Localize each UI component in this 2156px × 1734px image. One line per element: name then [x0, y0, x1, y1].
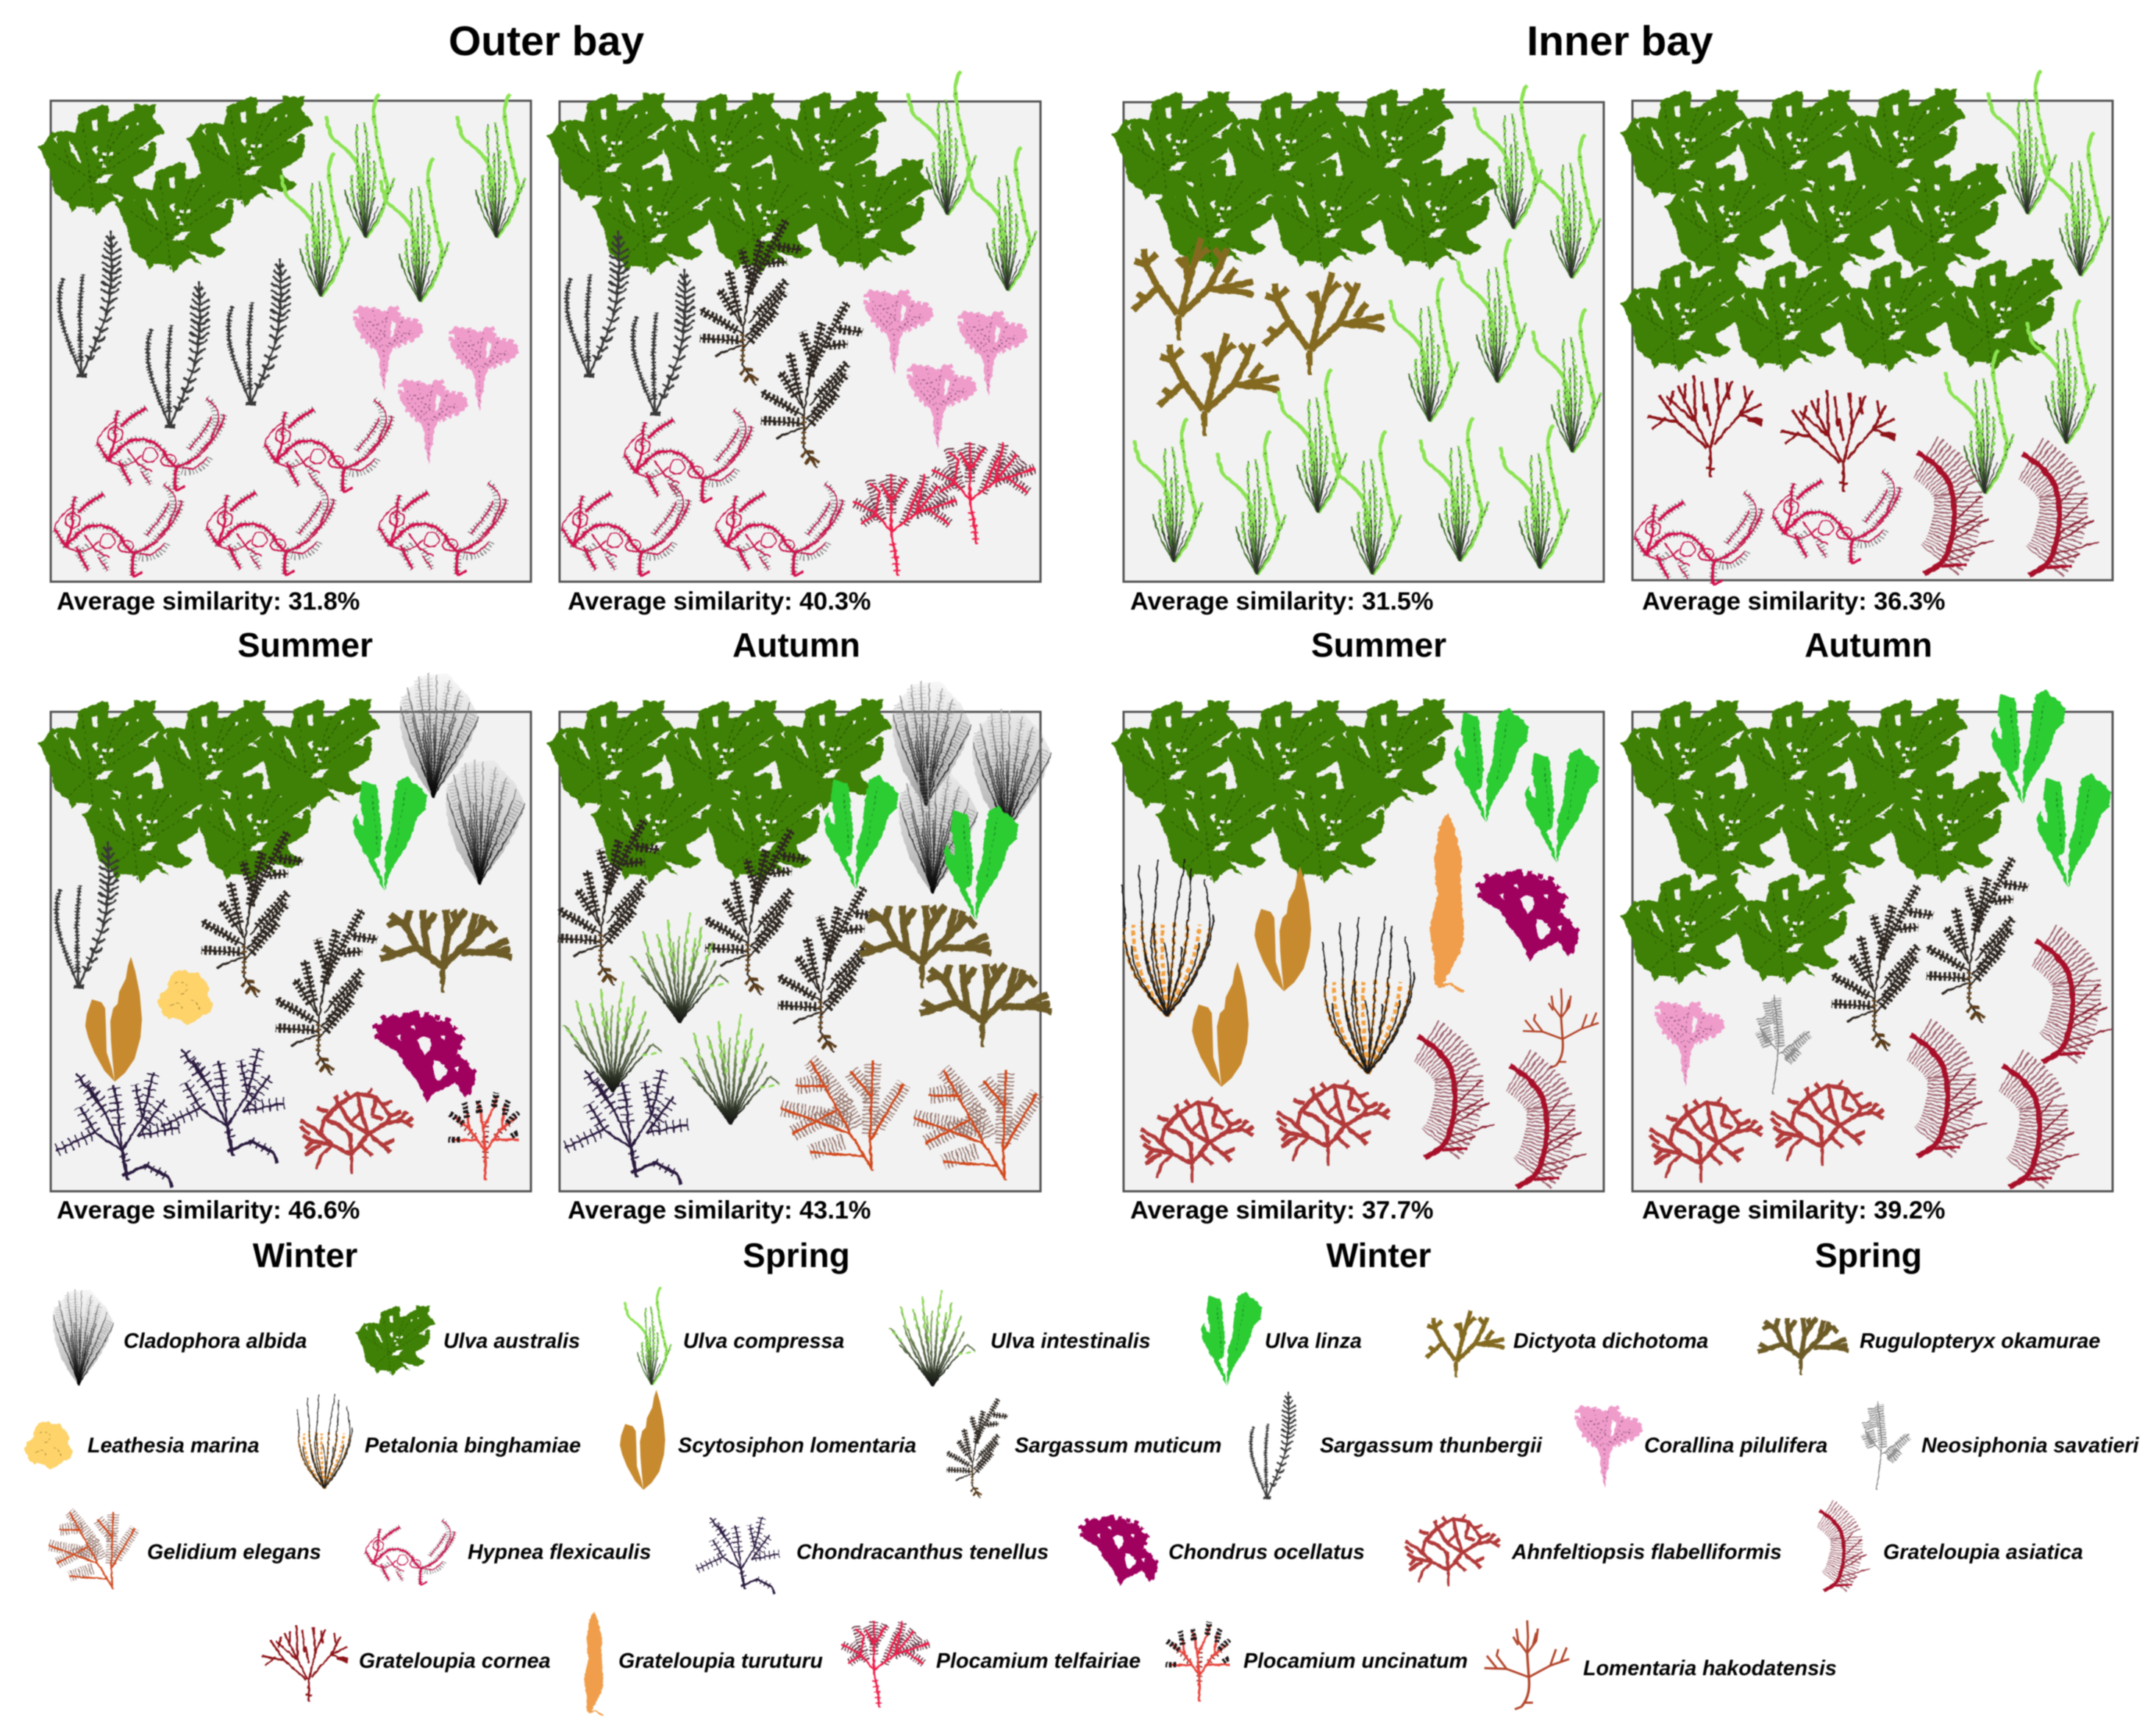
legend item: Chondrus ocellatus: Chondrus ocellatus — [1168, 1541, 1365, 1564]
Hypnea flexicaulis plants — [1635, 471, 1900, 585]
Ulva linza plants — [1454, 707, 1599, 863]
Sargassum thunbergii plants — [60, 231, 290, 427]
Grateloupia asiatica plants — [1418, 1036, 1586, 1187]
legend item: Ulva compressa: Ulva compressa — [683, 1330, 844, 1353]
legend item: Ahnfeltiopsis flabelliformis: Ahnfeltiopsis flabelliformis — [1511, 1541, 1782, 1564]
Plocamium uncinatum plant — [449, 1093, 518, 1180]
legend item: Chondracanthus tenellus — [696, 1517, 1049, 1594]
Ulva australis cluster — [1111, 88, 1499, 270]
legend item: Grateloupia turuturu — [584, 1612, 823, 1716]
legend item: Lomentaria hakodatensis — [1485, 1620, 1837, 1709]
legend item: Ulva linza: Ulva linza — [1265, 1330, 1362, 1353]
Rugulopteryx okamurae plant — [380, 910, 512, 993]
Ulva intestinalis plants — [563, 913, 779, 1124]
season heading: Outer bay autumn: Autumn — [732, 626, 860, 664]
Ulva linza plants — [1991, 689, 2111, 888]
Chondracanthus tenellus plant — [565, 1069, 688, 1185]
legend item: Grateloupia cornea — [262, 1625, 551, 1702]
Ulva compressa plants — [1946, 71, 2109, 493]
legend item: Ulva australis — [355, 1305, 580, 1376]
legend item: Hypnea flexicaulis — [365, 1520, 652, 1585]
legend item: Dictyota dichotoma — [1427, 1310, 1708, 1377]
season heading: Inner bay autumn: Autumn — [1805, 626, 1932, 664]
Plocamium telfairiae plants — [853, 443, 1035, 576]
Grateloupia asiatica plants — [1917, 452, 2099, 575]
legend item: Grateloupia asiatica — [1819, 1510, 2083, 1591]
panel: Inner bay spring — [1620, 689, 2113, 1191]
Ahnfeltiopsis flabelliformis plant — [300, 1088, 413, 1174]
season heading: Outer bay summer: Summer — [238, 626, 373, 664]
Grateloupia asiatica plants — [1910, 941, 2112, 1187]
legend item: Rugulopteryx okamurae: Rugulopteryx okamurae — [1860, 1330, 2100, 1353]
Ulva compressa plants — [1135, 85, 1601, 574]
legend item: Gelidium elegans: Gelidium elegans — [147, 1541, 321, 1564]
legend item: Grateloupia turuturu: Grateloupia turuturu — [618, 1649, 823, 1673]
legend item: Chondracanthus tenellus: Chondracanthus tenellus — [796, 1541, 1049, 1564]
legend item: Leathesia marina: Leathesia marina — [88, 1434, 260, 1458]
Ulva linza plants — [824, 774, 1018, 921]
legend item: Corallina pilulifera — [1577, 1406, 1828, 1488]
legend item: Plocamium telfairiae — [841, 1621, 1141, 1708]
Grateloupia turuturu plant — [1429, 813, 1464, 992]
legend item: Grateloupia asiatica: Grateloupia asiatica — [1883, 1541, 2083, 1564]
season heading: Outer bay spring: Spring — [743, 1236, 850, 1274]
legend item: Ulva compressa — [625, 1287, 844, 1385]
season heading: Inner bay summer: Summer — [1311, 626, 1446, 664]
Ulva australis cluster — [38, 95, 314, 273]
Rugulopteryx okamurae plants — [860, 905, 1052, 1047]
legend item: Ulva australis: Ulva australis — [443, 1330, 580, 1353]
panel: Outer bay summer — [38, 94, 531, 582]
legend item: Sargassum muticum — [946, 1399, 1221, 1498]
panel: Outer bay winter — [38, 673, 531, 1191]
Cladophora albida plants — [892, 681, 1052, 893]
Gelidium elegans plants — [781, 1060, 1037, 1180]
Hypnea flexicaulis plants — [562, 410, 843, 576]
legend item: Chondrus ocellatus — [1080, 1516, 1365, 1586]
legend item: Sargassum muticum: Sargassum muticum — [1015, 1434, 1221, 1458]
legend item: Plocamium telfairiae: Plocamium telfairiae — [936, 1649, 1141, 1673]
Ahnfeltiopsis flabelliformis plants — [1141, 1080, 1390, 1182]
legend item: Corallina pilulifera: Corallina pilulifera — [1644, 1434, 1828, 1458]
Ulva australis cluster — [546, 698, 893, 883]
season heading: Inner bay winter: Winter — [1327, 1236, 1431, 1274]
legend item: Gelidium elegans — [49, 1512, 321, 1589]
Leathesia marina plant — [157, 970, 213, 1024]
similarity label: Inner bay autumn: Average similarity: 36.3% — [1642, 588, 1945, 616]
similarity label: Inner bay winter: Average similarity: 37.7% — [1130, 1196, 1433, 1224]
Ulva compressa plants — [908, 71, 1036, 290]
Hypnea flexicaulis plants — [54, 398, 506, 577]
similarity label: Outer bay winter: Average similarity: 46.6% — [57, 1196, 360, 1224]
Sargassum muticum plants — [201, 832, 377, 1075]
legend item: Hypnea flexicaulis: Hypnea flexicaulis — [468, 1541, 652, 1564]
season heading: Outer bay winter: Winter — [253, 1236, 357, 1274]
legend item: Plocamium uncinatum: Plocamium uncinatum — [1243, 1649, 1468, 1673]
Ulva australis cluster — [1111, 698, 1454, 883]
Sargassum thunbergii plants — [567, 231, 695, 414]
legend: species key — [24, 1287, 2140, 1716]
legend item: Scytosiphon lomentaria — [620, 1390, 916, 1490]
panel: Inner bay autumn — [1620, 71, 2113, 585]
legend item: Sargassum thunbergii — [1251, 1392, 1543, 1498]
legend item: Ulva linza — [1201, 1291, 1362, 1386]
legend item: Leathesia marina — [24, 1421, 260, 1469]
Dictyota dichotoma plants — [1133, 238, 1384, 436]
Cladophora albida plants — [399, 673, 525, 885]
similarity label: Outer bay summer: Average similarity: 31.8% — [57, 588, 360, 616]
Sargassum muticum plants — [700, 220, 863, 468]
Corallina pilulifera plants — [865, 290, 1027, 449]
legend item: Sargassum thunbergii: Sargassum thunbergii — [1320, 1434, 1543, 1458]
legend item: Neosiphonia savatieri: Neosiphonia savatieri — [1921, 1434, 2140, 1458]
Corallina pilulifera plants — [355, 307, 518, 465]
season heading: Inner bay spring: Spring — [1815, 1236, 1922, 1274]
panel: Outer bay spring — [546, 681, 1052, 1191]
Ulva australis cluster — [546, 90, 933, 275]
title: Inner bay: Inner bay — [1527, 18, 1713, 65]
legend item: Petalonia binghamiae: Petalonia binghamiae — [365, 1434, 581, 1458]
Sargassum muticum plants — [558, 820, 879, 1052]
Neosiphonia savatieri plant — [1760, 995, 1810, 1094]
Petalonia binghamiae plants — [1122, 859, 1415, 1074]
similarity label: Inner bay summer: Average similarity: 31.5% — [1130, 588, 1433, 616]
legend item: Ulva intestinalis: Ulva intestinalis — [990, 1330, 1151, 1353]
legend item: Ulva intestinalis — [890, 1290, 1151, 1386]
Ulva australis cluster — [38, 698, 381, 883]
Chondrus ocellatus plant — [375, 1013, 476, 1103]
legend item: Cladophora albida: Cladophora albida — [124, 1330, 307, 1353]
Chondrus ocellatus plant — [1478, 871, 1579, 962]
similarity label: Outer bay autumn: Average similarity: 40.3% — [568, 588, 871, 616]
Chondracanthus tenellus plants — [56, 1048, 285, 1188]
legend item: Cladophora albida — [53, 1289, 307, 1385]
legend item: Scytosiphon lomentaria: Scytosiphon lomentaria — [678, 1434, 916, 1458]
legend item: Plocamium uncinatum — [1166, 1622, 1468, 1702]
Ulva australis cluster — [1620, 698, 2010, 985]
similarity label: Outer bay spring: Average similarity: 43.1% — [568, 1196, 871, 1224]
legend item: Ahnfeltiopsis flabelliformis — [1405, 1514, 1782, 1586]
Ulva australis cluster — [1620, 88, 2063, 372]
Sargassum muticum plants — [1832, 857, 2028, 1051]
panel: Inner bay winter — [1111, 698, 1604, 1191]
legend item: Neosiphonia savatieri — [1865, 1402, 2140, 1490]
legend item: Grateloupia cornea: Grateloupia cornea — [359, 1649, 551, 1673]
panel: Inner bay summer — [1111, 85, 1604, 582]
Lomentaria hakodatensis plant — [1523, 988, 1599, 1068]
legend item: Petalonia binghamiae — [297, 1394, 581, 1488]
Ulva compressa plants — [282, 94, 525, 302]
panel: Outer bay autumn — [546, 71, 1040, 582]
Ahnfeltiopsis flabelliformis plants — [1649, 1080, 1884, 1182]
similarity label: Inner bay spring: Average similarity: 39.2% — [1642, 1196, 1945, 1224]
Grateloupia cornea plants — [1648, 376, 1896, 492]
Ulva linza plant — [352, 776, 427, 891]
Corallina pilulifera plant — [1657, 1002, 1724, 1087]
legend item: Rugulopteryx okamurae — [1757, 1318, 2100, 1375]
Scytosiphon lomentaria plant — [85, 957, 142, 1082]
legend item: Lomentaria hakodatensis: Lomentaria hakodatensis — [1583, 1657, 1837, 1680]
title: Outer bay: Outer bay — [449, 18, 644, 65]
legend item: Dictyota dichotoma: Dictyota dichotoma — [1513, 1330, 1708, 1353]
Sargassum thunbergii plant — [57, 842, 118, 987]
Scytosiphon lomentaria plants — [1192, 866, 1311, 1087]
